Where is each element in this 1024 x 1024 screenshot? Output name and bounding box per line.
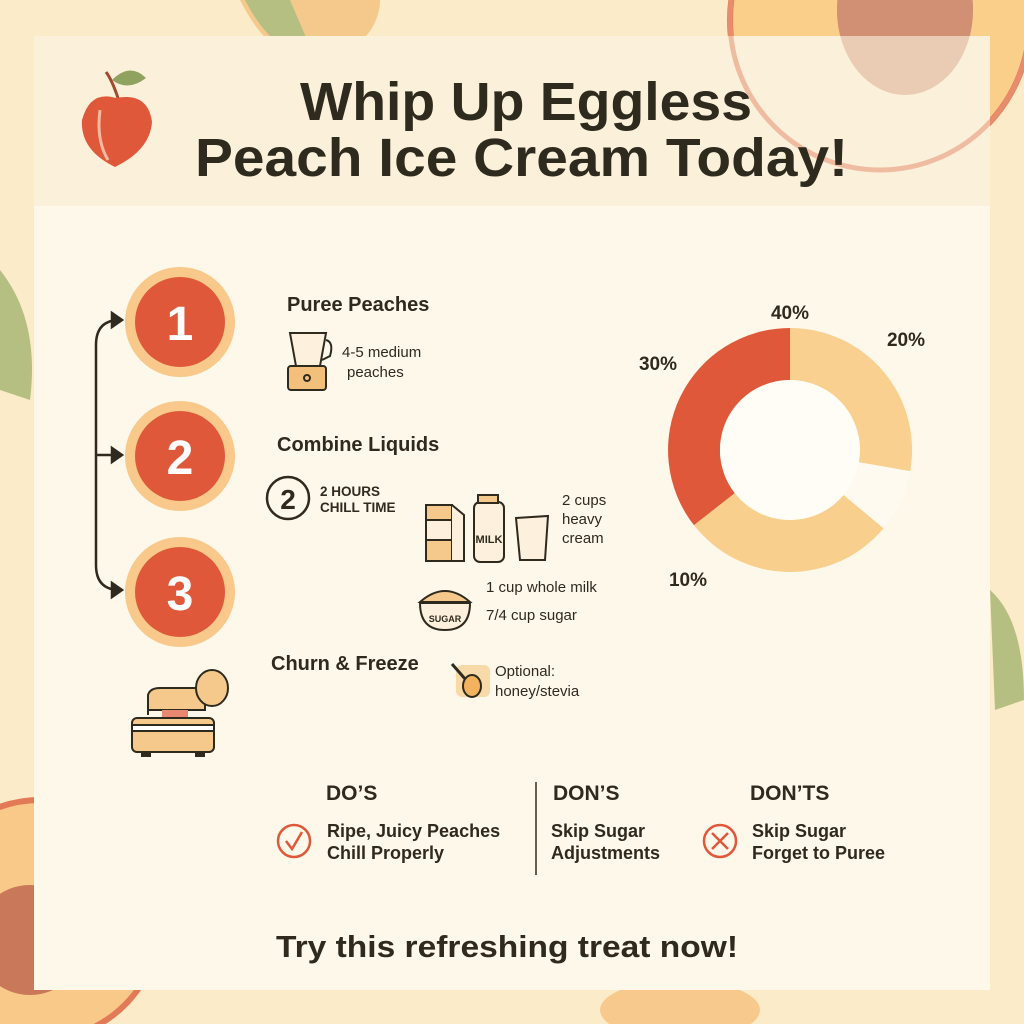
header band bbox=[34, 0, 1024, 206]
footer call to action: Try this refreshing treat now! bbox=[276, 929, 738, 964]
don'ts column: Forget to Puree bbox=[752, 843, 885, 863]
step 3 badge bbox=[125, 537, 235, 647]
step 3 badge: 3 bbox=[167, 568, 193, 621]
icon: peach bbox=[82, 70, 152, 167]
step 3: churn & freeze: Optional: bbox=[495, 663, 555, 680]
title: Peach Ice Cream Today! bbox=[195, 128, 848, 188]
donut chart: 30% bbox=[639, 354, 677, 375]
do's column: Ripe, Juicy Peaches bbox=[327, 821, 500, 841]
title: Whip Up Eggless bbox=[300, 72, 752, 132]
step 1: puree peaches bbox=[287, 294, 429, 390]
donut chart bbox=[639, 303, 925, 591]
icon: milk carton, bottle, jug bbox=[426, 495, 548, 562]
step 2: combine liquids: 7/4 cup sugar bbox=[486, 607, 577, 624]
icon: sugar bowl: SUGAR bbox=[429, 614, 462, 624]
icon: blender bbox=[288, 333, 331, 390]
title bbox=[195, 72, 848, 188]
icon: chill timer bbox=[267, 477, 309, 519]
icon: ice cream maker bbox=[132, 670, 228, 756]
timeline connector arrows bbox=[96, 313, 122, 597]
chart labels: 40% bbox=[771, 303, 809, 324]
step 3: churn & freeze: honey/stevia bbox=[495, 683, 580, 700]
don'ts column bbox=[704, 782, 885, 863]
don's column: Adjustments bbox=[551, 843, 660, 863]
do's column: DO’S bbox=[326, 782, 377, 805]
donut chart: 10% bbox=[669, 570, 707, 591]
step 2: combine liquids: 1 cup whole milk bbox=[486, 579, 597, 596]
step 2: combine liquids bbox=[267, 434, 606, 630]
don's column: Skip Sugar bbox=[551, 821, 645, 841]
step 2 badge: 2 bbox=[167, 432, 193, 485]
step 2: combine liquids: CHILL TIME bbox=[320, 500, 396, 515]
step 1 badge: 1 bbox=[167, 298, 193, 351]
step 2: combine liquids: heavy bbox=[562, 511, 603, 528]
do's column: Chill Properly bbox=[327, 843, 444, 863]
do's column bbox=[278, 782, 500, 863]
step 2: combine liquids: Combine Liquids bbox=[277, 434, 439, 456]
don'ts column: Skip Sugar bbox=[752, 821, 846, 841]
icon: honey dipper bbox=[452, 664, 490, 697]
step 1: puree peaches: peaches bbox=[347, 364, 404, 381]
step 1: puree peaches: 4-5 medium bbox=[342, 344, 421, 361]
don'ts column: DON’TS bbox=[750, 782, 829, 805]
icon: cross bbox=[704, 825, 736, 857]
step 1 badge bbox=[125, 267, 235, 377]
donut chart: 20% bbox=[887, 330, 925, 351]
icon: milk carton, bottle, jug: MILK bbox=[476, 534, 502, 546]
step 2 badge bbox=[125, 401, 235, 511]
don's column: DON’S bbox=[553, 782, 620, 805]
icon: sugar bowl bbox=[420, 591, 470, 630]
step 1: puree peaches: Puree Peaches bbox=[287, 294, 429, 316]
step 3: churn & freeze: Churn & Freeze bbox=[271, 653, 419, 675]
step 2: combine liquids: 2 cups bbox=[562, 492, 606, 509]
step 2: combine liquids: 2 HOURS bbox=[320, 484, 380, 499]
step 3: churn & freeze bbox=[271, 653, 580, 700]
icon: chill timer: 2 bbox=[280, 484, 296, 515]
step 2: combine liquids: cream bbox=[562, 530, 604, 547]
icon: check bbox=[278, 825, 310, 857]
don's column bbox=[551, 782, 660, 863]
